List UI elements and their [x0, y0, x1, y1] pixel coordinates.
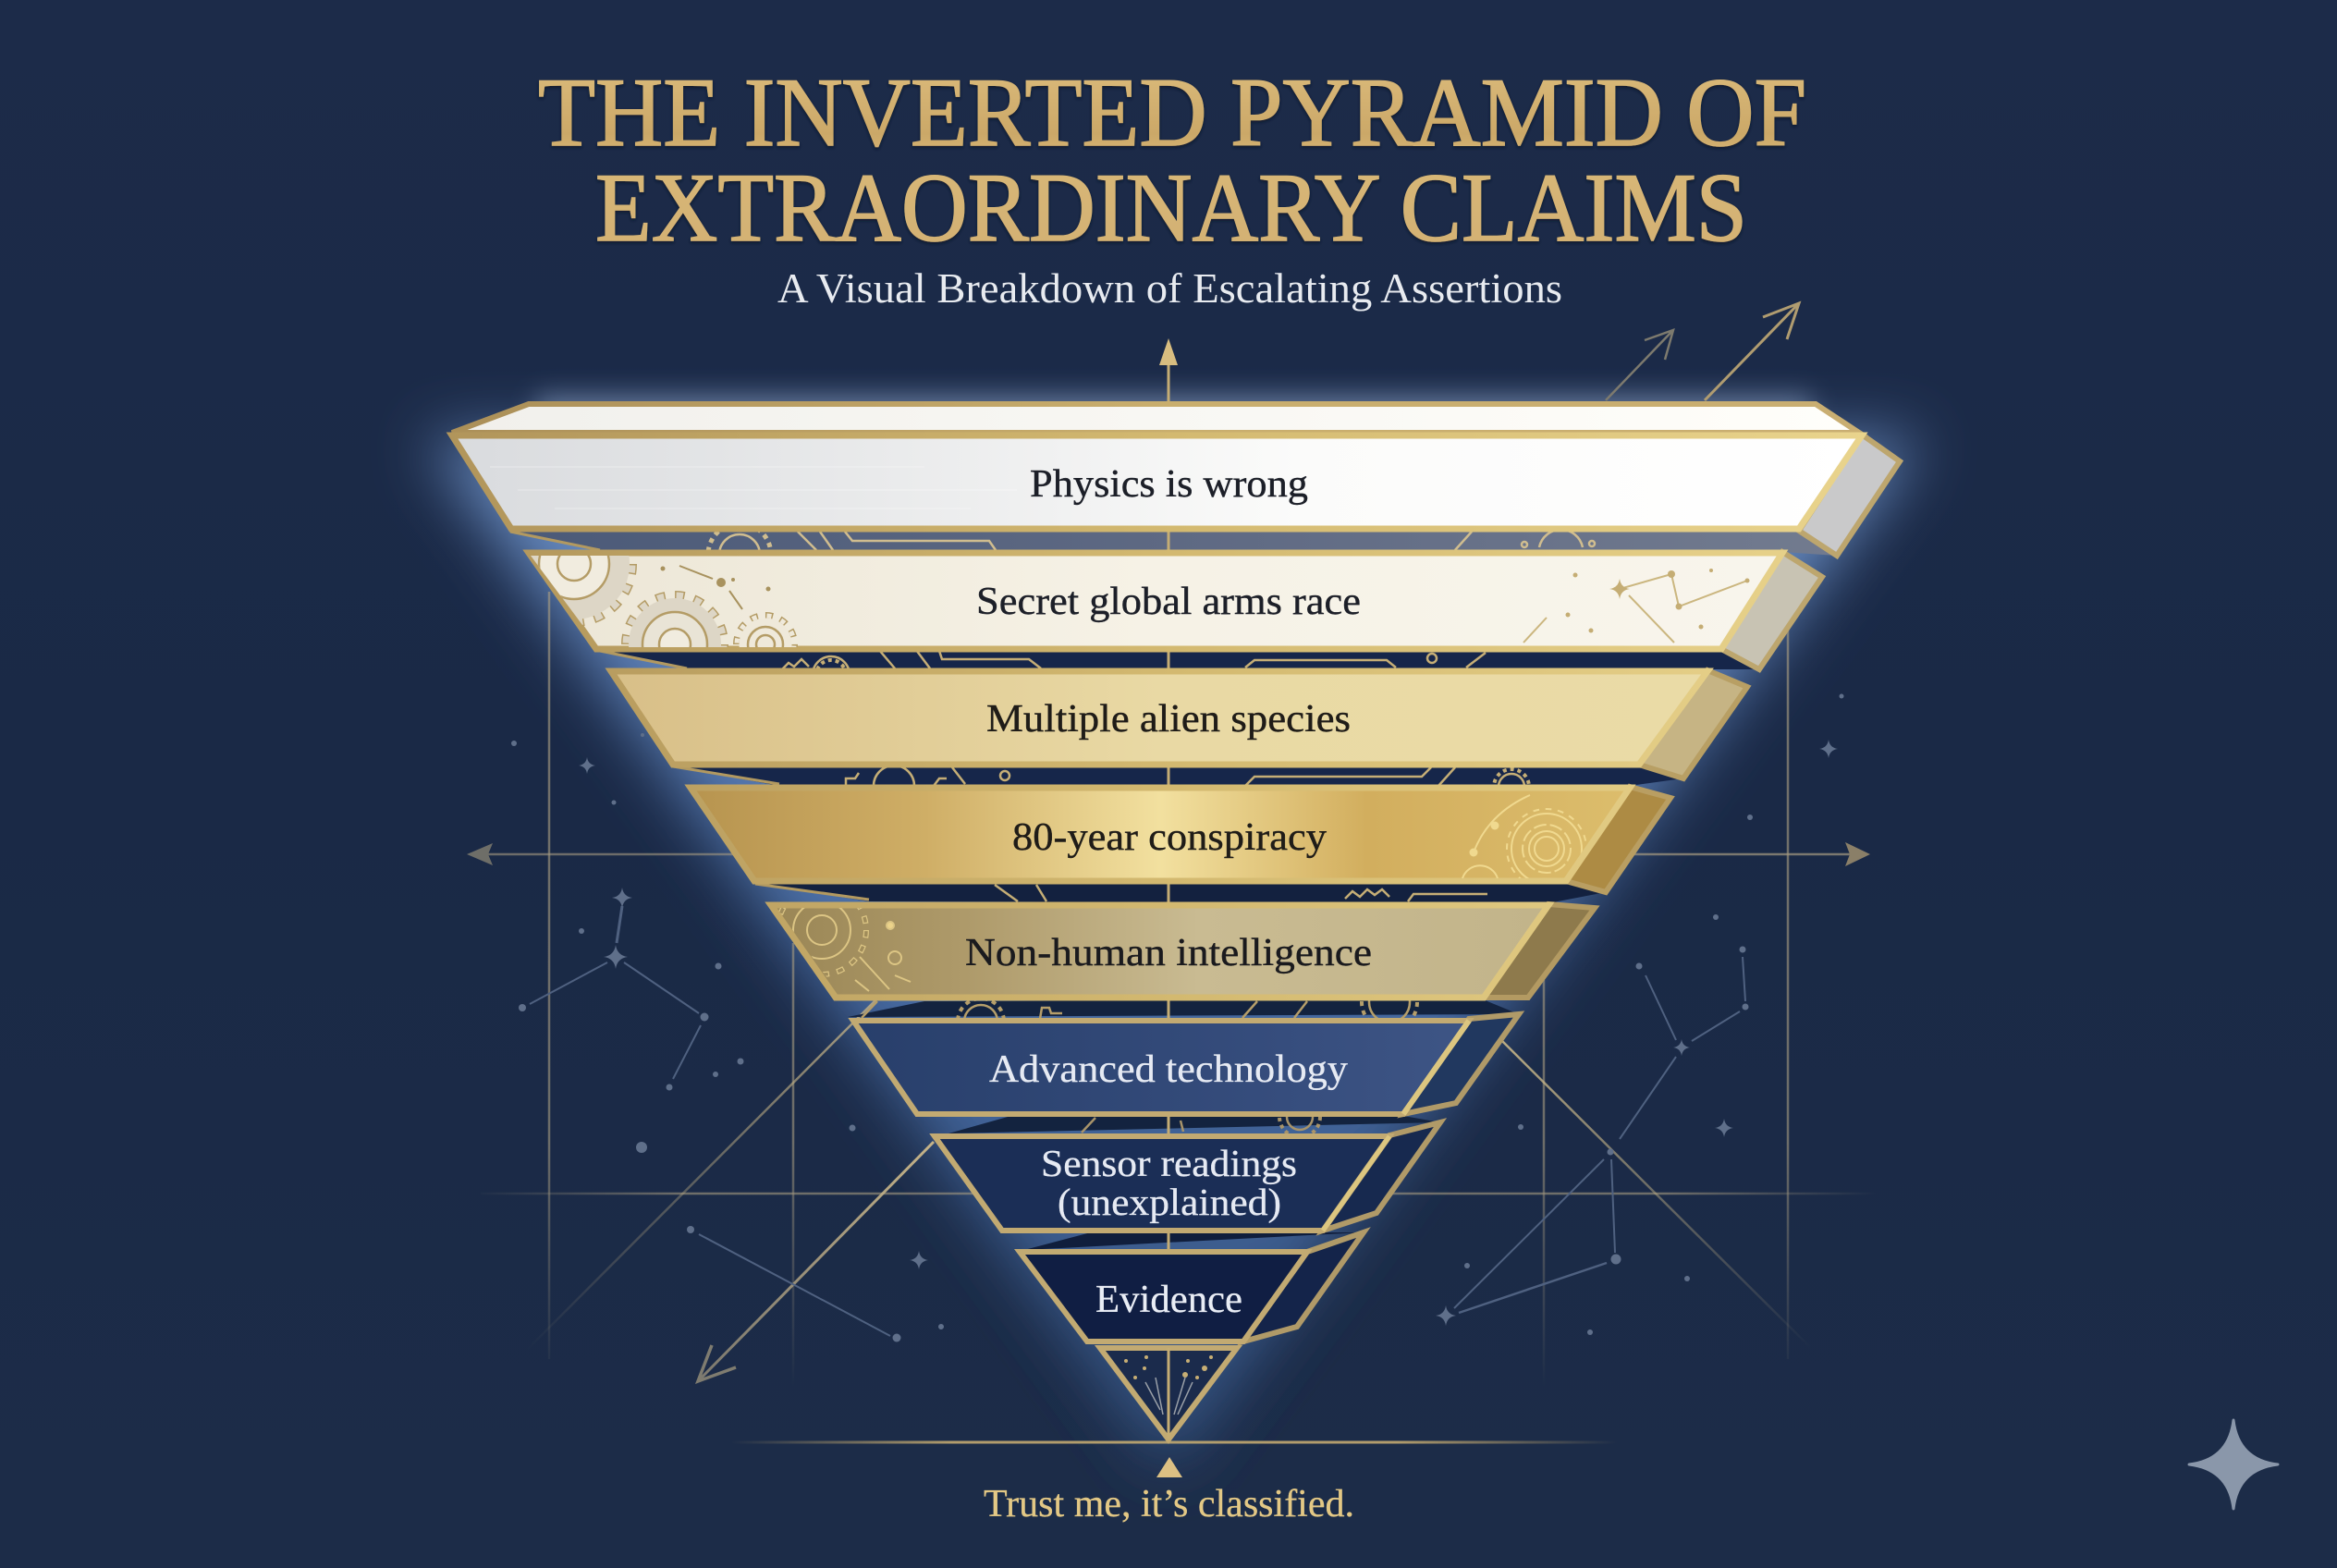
icon: constellation right: [1523, 569, 1749, 643]
title: EXTRAORDINARY CLAIMS: [595, 153, 1747, 262]
arrow: top right large: [1705, 303, 1799, 400]
title: [538, 58, 1806, 262]
tier 8: Evidence: Evidence: [1095, 1279, 1242, 1321]
tier 6: Advanced technology: Advanced technology: [989, 1048, 1348, 1091]
tier 7: Sensor readings (unexplained): Sensor readings: [1041, 1142, 1297, 1184]
title: THE INVERTED PYRAMID OF: [538, 58, 1806, 166]
pyramid glow: [427, 396, 1921, 1470]
tier 1: Physics is wrong: Physics is wrong: [1030, 463, 1308, 506]
arrow: left axis: [467, 843, 493, 865]
tagline: Trust me, it’s classified.: [984, 1483, 1354, 1525]
tier 8: Evidence: [1020, 1232, 1364, 1341]
tier 5: Non-human intelligence: Non-human intelligence: [965, 932, 1372, 974]
tier 1: Physics is wrong: [452, 404, 1900, 556]
subtitle: A Visual Breakdown of Escalating Assertions: [777, 265, 1562, 312]
arrow: lower left: [698, 1142, 934, 1381]
background grid lines and axes: [481, 362, 1877, 1405]
diagonal lines: [527, 999, 1811, 1350]
tier 4: 80-year conspiracy: 80-year conspiracy: [1012, 816, 1327, 859]
icon: gears and constellation left: [531, 556, 798, 647]
icon: gear circuit: [778, 908, 912, 992]
tier 7: Sensor readings (unexplained): (unexplained): [1058, 1181, 1281, 1223]
tier 3: Multiple alien species: Multiple alien species: [986, 698, 1351, 741]
icon: small triangle marker: [1156, 1457, 1182, 1477]
icon: watermark sparkle: [2189, 1420, 2278, 1509]
tier 2: Secret global arms race: Secret global arms race: [976, 581, 1361, 623]
base line: [730, 1440, 1618, 1444]
icon: gear with orbit: [1462, 795, 1586, 888]
arrow: right axis: [1845, 842, 1870, 866]
tier 2: Secret global arms race: [522, 548, 1827, 673]
arrow: central up: [1159, 338, 1178, 365]
constellations left: [511, 733, 944, 1342]
band undersides and gap details: [510, 523, 1837, 1257]
tier 4: 80-year conspiracy: [691, 787, 1670, 892]
arrow: top right faint: [1606, 330, 1673, 400]
tier 5: Non-human intelligence: [771, 886, 1595, 998]
tier 7: Sensor readings (unexplained): [935, 1122, 1440, 1231]
tier 9: apex triangle: [1100, 1348, 1237, 1439]
tier 6: Advanced technology: [853, 1014, 1519, 1114]
constellations right: [1436, 693, 1843, 1335]
tier 3: Multiple alien species: [611, 670, 1747, 778]
